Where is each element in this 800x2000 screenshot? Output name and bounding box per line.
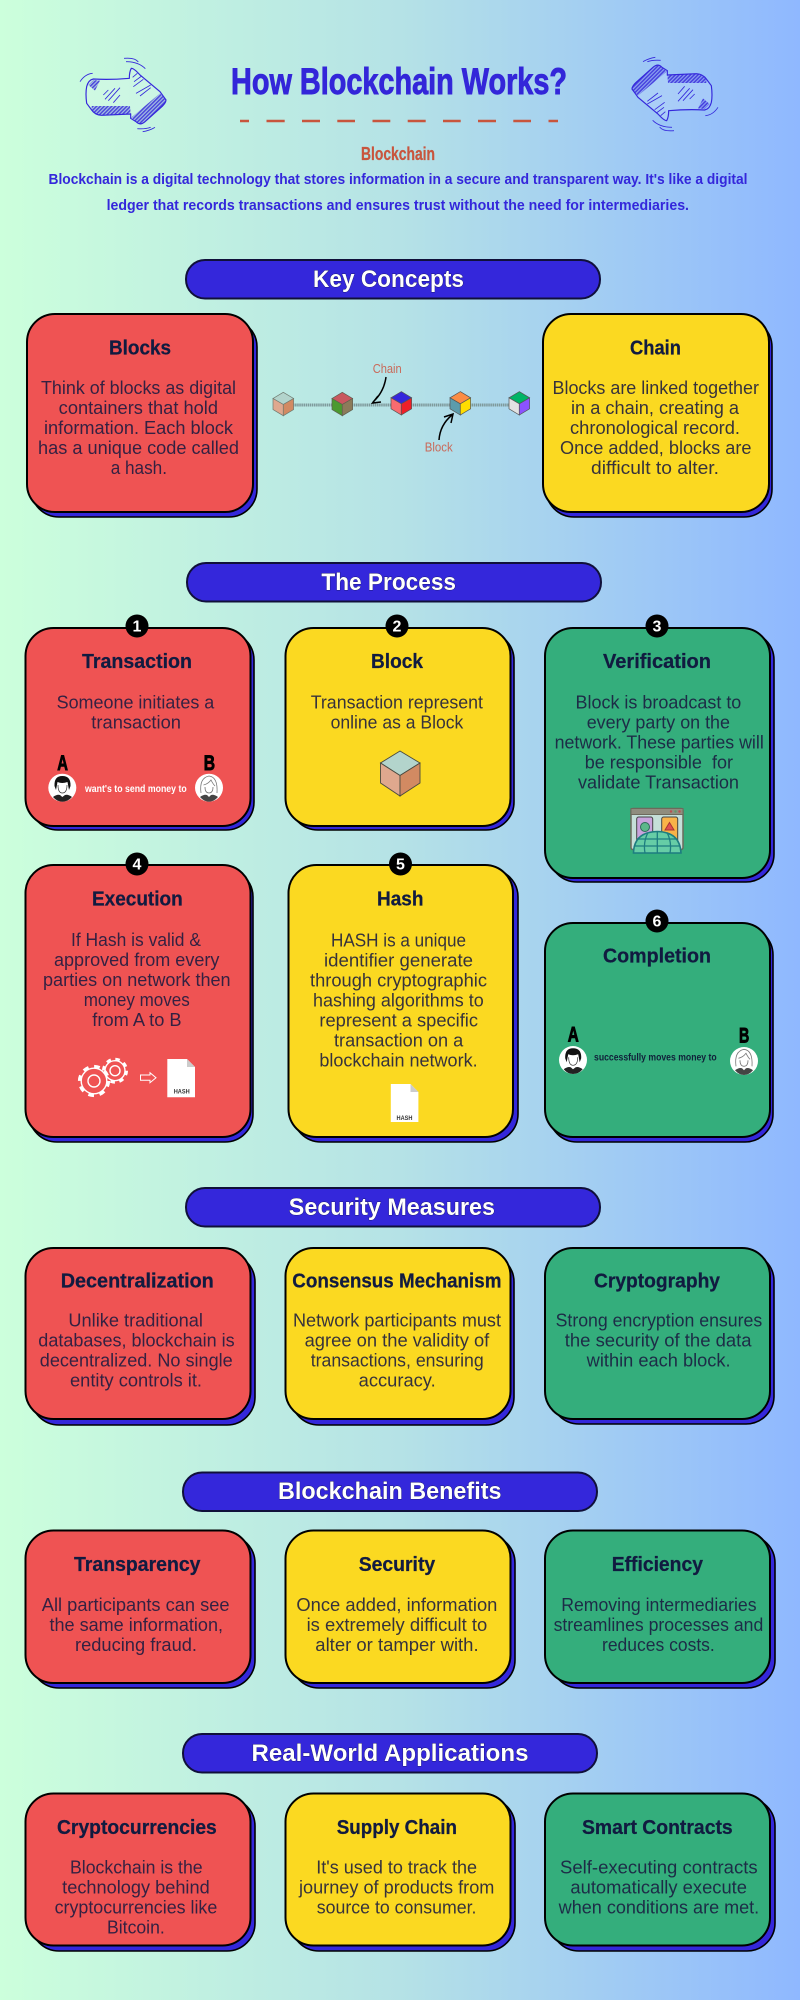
panel: Security [286, 1530, 515, 1688]
text: Verification body: every party on the [587, 712, 730, 732]
text: Block body [311, 692, 483, 732]
text: Hash body: hashing algorithms to [313, 990, 484, 1010]
text: Transparency body: All participants can see [42, 1595, 230, 1615]
panel: Cryptocurrencies [26, 1794, 255, 1951]
text: Decentralization body [38, 1311, 235, 1391]
text: Hash body: blockchain network. [319, 1050, 478, 1070]
text: Blocks body: containers that hold [59, 398, 218, 418]
heading: Cryptocurrencies: Cryptocurrencies [57, 1817, 217, 1839]
text: Chain body: Once added, blocks are [560, 438, 752, 458]
icon: right sketched arrow [632, 57, 718, 131]
heading: Decentralization: Decentralization [61, 1271, 214, 1293]
text: Cryptocurrencies body: cryptocurrencies like [55, 1897, 217, 1917]
text: Chain body: in a chain, creating a [571, 398, 740, 418]
panel: Consensus Mechanism [286, 1248, 514, 1425]
chart: chain of blocks diagram [273, 362, 530, 455]
text: Cryptography body [556, 1311, 762, 1371]
text: Security body: is extremely difficult to [307, 1615, 487, 1635]
heading: Efficiency: Efficiency [612, 1554, 704, 1576]
text: Chain body: Blocks are linked together [552, 378, 759, 398]
text: Verification body [555, 692, 764, 792]
panel: Transparency [26, 1530, 255, 1688]
text: Verification body: network. These parties will [555, 732, 764, 752]
panel: step 6 Completion [545, 910, 773, 1142]
panel: Decentralization [26, 1248, 255, 1425]
badge: 5: 5 [396, 856, 405, 874]
panel: step 3 Verification [545, 614, 774, 882]
text: Hash body: identifier generate [324, 950, 473, 970]
text: Transparency body: reducing fraud. [75, 1635, 197, 1655]
text: Blocks body: information. Each block [44, 418, 234, 438]
section heading: Real-World Applications [183, 1734, 597, 1772]
section heading: Key Concepts [186, 260, 600, 298]
text: Efficiency body [554, 1595, 763, 1655]
badge: 4 [126, 852, 148, 876]
text: Hash body: through cryptographic [310, 970, 487, 990]
panel: Efficiency [545, 1530, 775, 1688]
text: Smart Contracts body: when conditions are met. [558, 1897, 759, 1917]
section heading: The Process [187, 563, 601, 602]
text: Smart Contracts body [558, 1857, 759, 1917]
intro text [48, 171, 748, 214]
panel: Chain [543, 314, 772, 517]
badge: 4: 4 [133, 856, 142, 874]
section heading: The Process: The Process [321, 569, 456, 596]
text: Smart Contracts body: Self-executing contracts [560, 1857, 758, 1877]
heading: Transparency: Transparency [74, 1554, 201, 1576]
icon: cube 1 [273, 392, 294, 416]
badge: 5 [389, 852, 412, 876]
text: Consensus Mechanism body [293, 1311, 501, 1391]
icon: hash file: HASH [174, 1090, 190, 1096]
text: Blocks body: a hash. [111, 458, 167, 478]
badge: 2: 2 [393, 618, 402, 636]
text: Execution body: money moves [84, 990, 190, 1010]
label: A: A [568, 1024, 579, 1047]
icon: cube 3 [391, 392, 412, 415]
icon: gears [80, 1059, 126, 1096]
text: Consensus Mechanism body: accuracy. [359, 1371, 436, 1391]
text: Blocks body [38, 378, 239, 478]
text: Efficiency body: Removing intermediaries [561, 1595, 757, 1615]
heading: Execution: Execution [92, 888, 183, 910]
text: Cryptocurrencies body: Bitcoin. [107, 1917, 165, 1937]
badge: 3: 3 [653, 618, 662, 636]
text: Hash body: HASH is a unique [331, 930, 466, 950]
icon: hash file: HASH [396, 1116, 412, 1122]
text: Security body [296, 1595, 497, 1655]
text: Transparency body [42, 1595, 230, 1655]
text: Decentralization body: databases, blockchain is [38, 1331, 235, 1351]
heading: Blocks: Blocks [109, 337, 171, 359]
panel: step 1 Transaction [26, 614, 254, 830]
text: Cryptography body: the security of the data [565, 1331, 753, 1351]
badge: 3 [646, 614, 668, 638]
text: Chain body [552, 378, 759, 478]
text: Transparency body: the same information, [50, 1615, 223, 1635]
heading: Smart Contracts: Smart Contracts [582, 1817, 733, 1839]
text: Execution body: parties on network then [43, 970, 231, 990]
icon: left sketched arrow [80, 58, 166, 132]
badge: 2 [386, 614, 408, 638]
text: Verification body: be responsible for [585, 752, 733, 772]
text: Decentralization body: entity controls it. [70, 1371, 202, 1391]
text: Supply Chain body: source to consumer. [317, 1897, 476, 1917]
section heading: Real-World Applications: Real-World Applications [252, 1740, 528, 1767]
label: B: B [204, 752, 215, 775]
panel: step 2 Block [286, 614, 514, 830]
text: Efficiency body: streamlines processes and [554, 1615, 763, 1635]
heading: Block: Block [371, 651, 424, 673]
badge: 6 [646, 910, 668, 932]
heading: Completion: Completion [603, 946, 711, 968]
text: Verification body: validate Transaction [578, 772, 739, 792]
icon: cube 2 [332, 392, 353, 416]
panel: step 5 Hash [288, 852, 518, 1142]
text: Transaction body: transaction [91, 712, 181, 732]
text: Execution body: If Hash is valid & [71, 930, 201, 950]
text: Security body: alter or tamper with. [315, 1635, 479, 1655]
heading: Transaction: Transaction [82, 651, 192, 673]
panel: Supply Chain [286, 1794, 515, 1951]
title: How Blockchain Works? [231, 61, 567, 102]
heading: Cryptography: Cryptography [594, 1271, 721, 1293]
icon: cube [380, 751, 420, 796]
intro text: ledger that records transactions and ensures trust without the need for intermediaries. [107, 197, 689, 214]
text: Blocks body: Think of blocks as digital [41, 378, 236, 398]
text: Verification body: Block is broadcast to [576, 692, 741, 712]
badge: 1 [126, 614, 148, 638]
heading: Chain: Chain [630, 337, 681, 359]
text: Execution body [43, 930, 231, 1030]
heading: Supply Chain: Supply Chain [337, 1817, 457, 1839]
text: Hash body [310, 930, 487, 1070]
text: Supply Chain body: It's used to track the [316, 1857, 477, 1877]
badge: 1: 1 [133, 618, 142, 636]
text: Execution body: from A to B [92, 1010, 182, 1030]
text: Hash body: represent a specific [319, 1010, 478, 1030]
text: successfully moves money to: successfully moves money to [594, 1052, 717, 1063]
text: Cryptocurrencies body [55, 1857, 217, 1937]
text: Consensus Mechanism body: transactions, ensuring [311, 1351, 484, 1371]
heading: Security: Security [359, 1554, 436, 1576]
text: Consensus Mechanism body: Network participants must [293, 1311, 501, 1331]
label: Block: Block [425, 441, 453, 455]
badge: 6: 6 [653, 914, 662, 930]
icon: cube 5 [509, 392, 530, 415]
text: Block body: Transaction represent [311, 692, 483, 712]
text: Cryptography body: within each block. [586, 1351, 731, 1371]
text: Cryptocurrencies body: Blockchain is the [70, 1857, 203, 1877]
text: Security body: Once added, information [296, 1595, 497, 1615]
section heading: Security Measures [186, 1188, 600, 1226]
text: Supply Chain body [298, 1857, 494, 1917]
icon: hash file [391, 1084, 418, 1122]
icon: hash file [167, 1059, 195, 1097]
arrow: to chain [372, 377, 386, 403]
arrow: gears to hash [140, 1073, 156, 1083]
text: Transaction body: Someone initiates a [57, 692, 215, 712]
icon: avatar A [559, 1046, 587, 1074]
arrow: to block [439, 414, 453, 440]
text: Cryptocurrencies body: technology behind [62, 1877, 210, 1897]
section heading: Security Measures: Security Measures [289, 1194, 495, 1221]
label: B: B [739, 1025, 749, 1048]
panel: Blocks [27, 314, 257, 517]
text: Chain body: chronological record. [570, 418, 740, 438]
text: Smart Contracts body: automatically execute [570, 1877, 747, 1897]
icon: cube 4 [450, 392, 471, 415]
text: Consensus Mechanism body: agree on the validity of [305, 1331, 490, 1351]
heading: Hash: Hash [377, 888, 424, 910]
section heading: Blockchain Benefits: Blockchain Benefits [278, 1478, 502, 1505]
text: Cryptography body: Strong encryption ensures [556, 1311, 762, 1331]
text: Transaction body [57, 692, 215, 732]
heading: Verification: Verification [603, 651, 711, 673]
icon: avatar B [195, 774, 223, 802]
text: want's to send money to: want's to send money to [84, 784, 187, 795]
text: Chain body: difficult to alter. [591, 458, 719, 478]
subtitle: Blockchain [361, 144, 435, 164]
text: Execution body: approved from every [54, 950, 219, 970]
label: Chain: Chain [373, 362, 402, 376]
label: A: A [57, 752, 68, 775]
icon: avatar A [48, 774, 76, 802]
intro text: Blockchain is a digital technology that stores information in a secure and transparent way. It's like a digital [48, 171, 748, 188]
icon: avatar B [730, 1047, 758, 1075]
section heading: Blockchain Benefits [183, 1472, 597, 1511]
section heading: Key Concepts: Key Concepts [313, 266, 464, 293]
panel: Cryptography [545, 1248, 774, 1424]
text: Supply Chain body: journey of products from [298, 1877, 494, 1897]
text: Decentralization body: decentralized. No single [40, 1351, 233, 1371]
panel: Smart Contracts [545, 1794, 775, 1951]
panel: step 4 Execution [26, 852, 253, 1142]
icon: browser and globe [631, 808, 683, 853]
text: Efficiency body: reduces costs. [602, 1635, 715, 1655]
text: Block body: online as a Block [331, 712, 464, 732]
text: Decentralization body: Unlike traditional [68, 1311, 203, 1331]
text: Blocks body: has a unique code called [38, 438, 239, 458]
text: Hash body: transaction on a [334, 1030, 464, 1050]
heading: Consensus Mechanism: Consensus Mechanism [292, 1271, 502, 1293]
